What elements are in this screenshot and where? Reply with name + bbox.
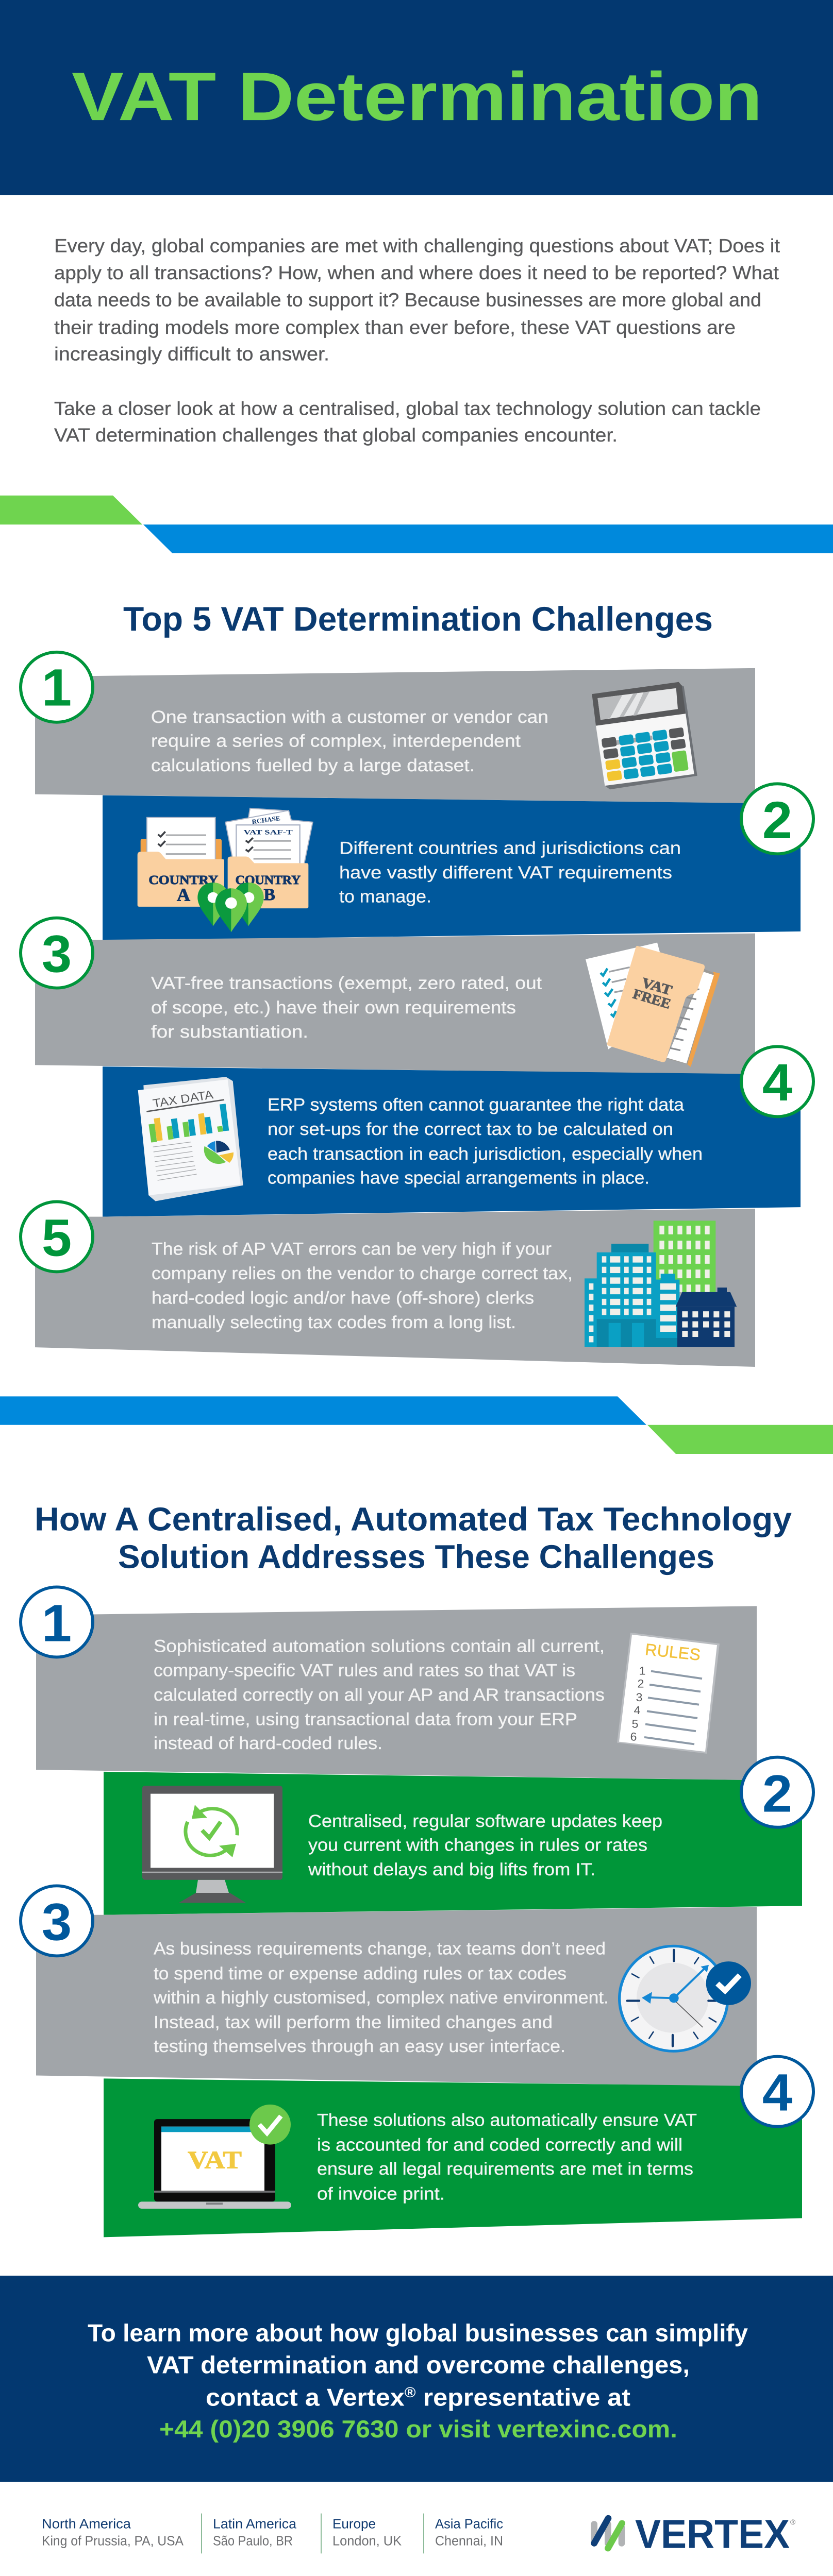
text: challenge 4: each transaction in each jurisdiction, especially when [268, 1144, 703, 1164]
text: challenge 5: manually selecting tax codes from a long list. [152, 1313, 516, 1332]
icon: tax data report [138, 1077, 243, 1201]
text: challenge 1: One transaction with a customer or vendor can [151, 707, 548, 727]
icon: rules sheet: 6 [630, 1730, 637, 1743]
intro text: Take a closer look at how a centralised, global tax technology solution can tackle [54, 398, 761, 419]
text: challenge 4: ERP systems often cannot guarantee the right data [268, 1095, 685, 1114]
icon: rules sheet: 5 [632, 1717, 638, 1730]
badge: number 1: 1 [42, 658, 72, 717]
badge: number 3 [21, 1886, 93, 1956]
icon: VAT free folder: VAT [640, 975, 674, 998]
icon: rules sheet: RULES [644, 1640, 702, 1664]
icon: tax data report: TAX DATA [152, 1088, 214, 1110]
text: solution 2 [308, 1811, 662, 1879]
call to action text: representative at [416, 2384, 630, 2411]
text: solution 1 [154, 1637, 605, 1753]
call to action text: To learn more about how global businesses can simplify [88, 2320, 748, 2347]
text: challenge 1: calculations fuelled by a large dataset. [151, 756, 475, 775]
intro text: their trading models more complex than ever before, these VAT questions are [54, 317, 736, 338]
text: solution 3: Instead, tax will perform the limited changes and [154, 2012, 553, 2032]
heading: top 5 challenges: Top 5 VAT Determination Challenges [123, 600, 713, 638]
icon: country folders and pins: VAT SAF-T [244, 828, 293, 836]
text: challenge 3: of scope, etc.) have their own requirements [151, 998, 516, 1018]
text: solution 3: As business requirements change, tax teams don’t need [154, 1939, 606, 1958]
icon: calculator [592, 682, 697, 789]
text: challenge 4: nor set-ups for the correct tax to be calculated on [268, 1120, 673, 1139]
footer offices [42, 2514, 503, 2553]
icon: rules sheet: 3 [636, 1691, 642, 1704]
footer offices: Latin America [213, 2516, 297, 2532]
badge: number 4: 4 [762, 1054, 792, 1112]
text: solution 4: ensure all legal requirements are met in terms [317, 2159, 693, 2179]
icon: VAT free folder: FREE [631, 986, 673, 1012]
text: challenge 2: have vastly different VAT requirements [339, 863, 672, 883]
footer offices: São Paulo, BR [213, 2533, 293, 2549]
heading: how a centralised solution addresses challenges [35, 1500, 792, 1575]
footer offices: Chennai, IN [435, 2533, 503, 2549]
intro text: increasingly difficult to answer. [54, 344, 329, 365]
intro text: apply to all transactions? How, when and where does it need to be reported? What [54, 263, 779, 284]
title: VAT Determination [72, 59, 762, 135]
panel: solution 3 [21, 1886, 757, 2087]
call to action banner [0, 2276, 833, 2482]
badge: number 4 [741, 2057, 813, 2127]
icon: clock with check [620, 1946, 751, 2051]
text: solution 4: is accounted for and coded correctly and will [317, 2135, 682, 2155]
text: solution 3: to spend time or expense adding rules or tax codes [154, 1964, 567, 1984]
call to action text [88, 2320, 748, 2443]
intro text: data needs to be available to support it? Because businesses are more global and [54, 290, 761, 311]
badge: number 2: 2 [762, 1765, 792, 1823]
panel: solution 2 [104, 1757, 813, 1915]
icon: rules sheet: 1 [639, 1664, 645, 1677]
icon: laptop with VAT [138, 2105, 291, 2209]
text: challenge 2 [339, 838, 681, 906]
text: solution 1: calculated correctly on all your AP and AR transactions [154, 1685, 605, 1705]
text: challenge 3 [151, 973, 542, 1042]
call to action text: contact a Vertex [206, 2384, 399, 2411]
text: solution 4: These solutions also automatically ensure VAT [317, 2111, 697, 2130]
badge: number 2 [741, 1757, 813, 1827]
text: solution 2: Centralised, regular software updates keep [308, 1811, 662, 1831]
panel: challenge 2 [103, 784, 813, 940]
icon: country folders and pins: A [177, 885, 190, 905]
intro text: VAT determination challenges that global companies encounter. [54, 425, 618, 446]
icon: country folders and pins: B [264, 885, 275, 904]
heading: how a centralised solution addresses challenges: Solution Addresses These Challenges [118, 1538, 714, 1575]
footer offices: London, UK [332, 2533, 402, 2549]
text: challenge 4: companies have special arrangements in place. [268, 1168, 649, 1188]
text: solution 3: within a highly customised, complex native environment. [153, 1988, 609, 2007]
text: solution 1: company-specific VAT rules and rates so that VAT is [154, 1660, 575, 1680]
call to action text: ® [405, 2385, 416, 2401]
panel: challenge 5 [21, 1201, 755, 1367]
panel: solution 1 [21, 1587, 757, 1780]
icon: country folders and pins: COUNTRY [236, 873, 301, 887]
badge: number 2: 2 [762, 791, 792, 850]
call to action text: VAT determination and overcome challenges, [147, 2352, 690, 2379]
logo: Vertex: ® [790, 2518, 796, 2526]
text: solution 2: you current with changes in rules or rates [308, 1835, 647, 1855]
text: challenge 3: for substantiation. [151, 1022, 308, 1042]
text: solution 4: of invoice print. [317, 2184, 445, 2204]
icon: city buildings [585, 1221, 737, 1347]
badge: number 1: 1 [42, 1594, 72, 1653]
text: solution 3 [153, 1939, 609, 2056]
call to action text: +44 (0)20 3906 7630 or visit vertexinc.com. [159, 2416, 677, 2443]
text: challenge 5: hard-coded logic and/or have (off-shore) clerks [152, 1288, 534, 1308]
text: solution 4 [317, 2111, 697, 2204]
text: solution 2: without delays and big lifts from IT. [308, 1860, 595, 1879]
badge: number 3 [21, 918, 93, 988]
badge: number 5 [21, 1201, 93, 1272]
text: challenge 1: require a series of complex, interdependent [151, 731, 521, 751]
badge: number 5: 5 [42, 1209, 72, 1267]
icon: country folders and pins: RCHASE [251, 814, 281, 825]
panel: challenge 4 [103, 1046, 813, 1217]
footer offices: Europe [332, 2516, 376, 2532]
panel: solution 4 [104, 2057, 813, 2237]
text: solution 1: Sophisticated automation solutions contain all current, [154, 1637, 605, 1656]
icon: laptop with VAT: VAT [188, 2146, 242, 2174]
icon: rules sheet: 2 [638, 1677, 644, 1690]
logo: Vertex: VERTEX [635, 2512, 790, 2557]
panel: challenge 1 [21, 652, 755, 803]
icon: country folders and pins [138, 808, 313, 932]
text: solution 1: in real-time, using transactional data from your ERP [154, 1709, 577, 1729]
badge: number 3: 3 [42, 1893, 72, 1952]
header banner [0, 0, 833, 195]
badge: number 2 [741, 784, 813, 854]
text: challenge 4 [268, 1095, 703, 1188]
text: challenge 1 [151, 707, 548, 775]
text: challenge 5: company relies on the vendor to charge correct tax, [152, 1264, 573, 1283]
intro text [54, 236, 780, 446]
badge: number 1 [21, 652, 93, 722]
intro text: Every day, global companies are met with challenging questions about VAT; Does it [54, 236, 780, 257]
heading: how a centralised solution addresses challenges: How A Centralised, Automated Tax Technology [35, 1500, 792, 1537]
divider stripes top [0, 496, 833, 553]
text: challenge 2: Different countries and jurisdictions can [339, 838, 681, 858]
icon: rules sheet [617, 1633, 720, 1754]
icon: monitor with refresh [142, 1786, 282, 1903]
footer offices: North America [42, 2516, 131, 2532]
text: challenge 2: to manage. [339, 887, 431, 906]
footer offices: King of Prussia, PA, USA [42, 2533, 184, 2549]
footer offices: Asia Pacific [435, 2516, 503, 2532]
icon: country folders and pins: COUNTRY [148, 873, 218, 887]
text: solution 3: testing themselves through an easy user interface. [154, 2037, 565, 2056]
icon: rules sheet: 4 [634, 1704, 641, 1717]
divider stripes middle [0, 1396, 833, 1454]
text: challenge 3: VAT-free transactions (exempt, zero rated, out [151, 973, 542, 993]
badge: number 3: 3 [42, 925, 72, 984]
badge: number 4: 4 [762, 2063, 792, 2122]
badge: number 4 [741, 1046, 813, 1116]
text: solution 1: instead of hard-coded rules. [154, 1734, 382, 1753]
panel: challenge 3 [21, 918, 755, 1075]
badge: number 1 [21, 1587, 93, 1657]
icon: VAT free folder [586, 943, 720, 1067]
text: challenge 5: The risk of AP VAT errors can be very high if your [152, 1239, 552, 1259]
text: challenge 5 [152, 1239, 573, 1332]
